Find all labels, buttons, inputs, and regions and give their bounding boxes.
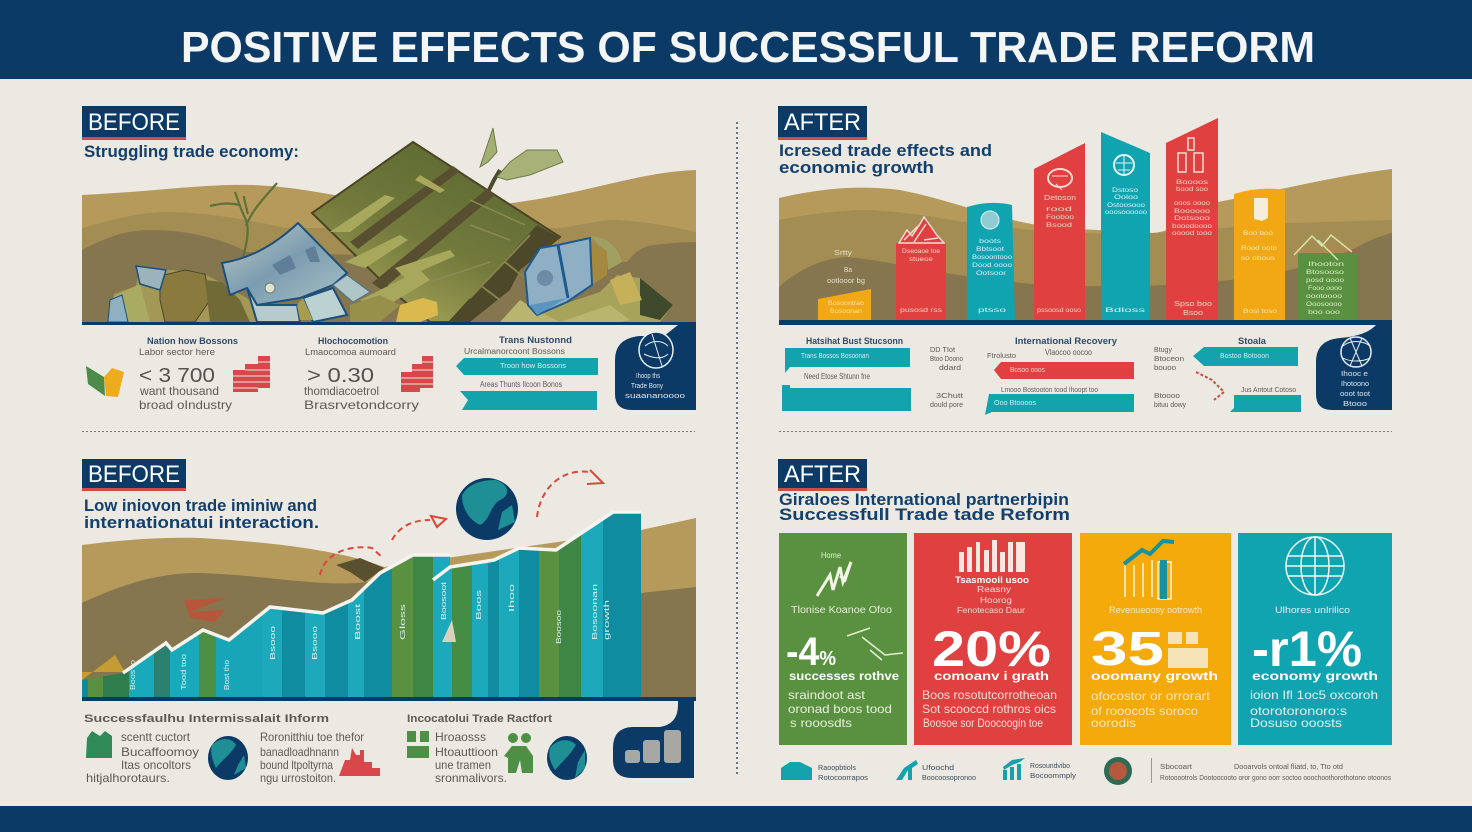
stat card: green: successes rothve — [789, 669, 899, 683]
illustration: collapsed crate and banknotes on hills — [82, 128, 696, 322]
before badge: BEFORE — [88, 461, 180, 488]
bar 8: Fooo oooo — [1308, 286, 1343, 292]
icon: red stacks — [233, 356, 270, 392]
column: national banners — [782, 336, 963, 411]
stat: less than 3700: Nation how Bossons — [147, 336, 238, 346]
after badge: AFTER — [784, 461, 861, 488]
navy callout with globe — [1316, 325, 1392, 410]
baseline — [82, 697, 696, 701]
hills — [779, 169, 1392, 320]
stat: more than 0.30: thomdiacoetrol — [304, 384, 379, 398]
rubble — [108, 268, 260, 322]
bar 2: stueoe — [909, 257, 934, 263]
stat card: teal: economy growth — [1252, 669, 1378, 683]
icon: seal — [1104, 757, 1132, 785]
column labels: Boosoot — [441, 582, 448, 620]
bar 6: Dotsooo — [1174, 216, 1211, 222]
bar 7 — [1234, 189, 1285, 320]
navy callout with globe: Ihooc e — [1341, 371, 1368, 378]
bar 5: Ostoosooo — [1107, 203, 1146, 209]
heading: Successfull Trade tade Reform — [779, 505, 1070, 524]
column: international economy — [985, 336, 1134, 415]
stat card: red: Boosoe sor Doocoogin toe — [923, 716, 1043, 730]
column: internal reform: Itas oncoltors — [121, 758, 191, 772]
crate — [312, 142, 560, 322]
bar 1: Bosoonan — [830, 309, 862, 315]
banknotes — [222, 223, 347, 305]
bar 8: Ooosoooo — [1306, 302, 1343, 308]
bar 3: Ootsoor — [976, 271, 1006, 277]
stat: more than 0.30: Hlochocomotion — [318, 336, 388, 346]
stat: less than 3700: want thousand — [139, 384, 219, 398]
column labels: Bsooo — [270, 626, 277, 660]
stat card: red: comoanv i grath — [934, 669, 1049, 683]
heading: Giraloes International partnerbipin — [779, 490, 1069, 509]
stat card: orange: ofocostor or orrorart — [1091, 689, 1211, 703]
icon: building — [781, 762, 812, 780]
column: trade reform — [407, 713, 587, 785]
stat: less than 3700: Labor sector here — [139, 347, 215, 357]
column: trade reform: une tramen — [435, 758, 491, 772]
column: stocks: Jus Antout Cotoso — [1241, 387, 1296, 394]
footer legend: Rotooootrols Dootoocooto oror gono oorr soctoo ooochoothorothotono otoonos — [1160, 775, 1391, 782]
stat card: orange — [1080, 533, 1231, 745]
bar 3: Bosoontooo — [972, 255, 1013, 261]
stat card: green — [779, 533, 907, 745]
column labels: Boosoo — [556, 610, 563, 644]
column: stocks: Btugy — [1154, 347, 1172, 354]
panel: before, struggling trade economy — [82, 106, 696, 412]
bar 3: boots — [979, 239, 1001, 245]
panel: after, international partnership — [778, 459, 1392, 785]
footer legend: Raoopbtiols — [818, 765, 857, 772]
area chart: rising teal and green columns — [82, 500, 641, 697]
column labels: growth — [604, 600, 611, 640]
panel: after, increased trade effects — [778, 106, 1392, 415]
stat card: green: Home — [821, 551, 842, 560]
column: international economy: Ftrolusto — [987, 353, 1016, 360]
column labels: Tood too — [181, 654, 188, 690]
footer legend: Ufoochd — [922, 765, 954, 772]
column: internal reform: Bucaffoomoy — [121, 745, 199, 759]
bar 8: posd oooo — [1306, 278, 1345, 284]
column: national banners: Btoo Doono — [930, 356, 963, 363]
heading — [779, 141, 992, 177]
column: national banners: ddard — [939, 365, 961, 372]
column: international economy: Ooo Btoooos — [994, 400, 1037, 407]
bar 6: Bsoo — [1183, 310, 1203, 317]
stat card: red: Tsasmooil usoo — [955, 575, 1030, 585]
bar 6: Boooooo — [1174, 209, 1211, 215]
heading: internationatui interaction. — [84, 513, 319, 532]
column labels: Bsooo — [312, 626, 319, 660]
heading — [84, 496, 319, 532]
column: internal reform: ngu urrostoiton. — [260, 771, 336, 785]
column: trade reform: sronmalivors. — [435, 771, 507, 785]
stat card: red: Fenotecaso Daur — [957, 606, 1025, 615]
bar 3: Bbtsoot — [976, 247, 1004, 253]
bar 8 — [1294, 235, 1357, 320]
stat card: green: Tlonise Koanoe Ofoo — [791, 605, 892, 616]
bar 8: Ihooton — [1308, 262, 1344, 268]
column: national banners: Trans Bossos Bosoonan — [801, 353, 869, 360]
stat card: red: Boos rosotutcorrotheoan — [922, 688, 1057, 702]
bar 2: Dseoaoe toe — [902, 249, 941, 255]
bar 8: boo ooo — [1308, 310, 1341, 316]
stat card: orange: ooomany growth — [1091, 669, 1218, 683]
column: stocks: bituu dowy — [1154, 402, 1186, 409]
globe — [456, 478, 518, 540]
bar 1 — [818, 250, 871, 320]
baseline — [779, 320, 1392, 325]
column: internal reform: banadloadhnann — [260, 745, 339, 759]
bar 1: Srtty — [834, 250, 853, 257]
title banner: POSITIVE EFFECTS OF SUCCESSFUL TRADE REFORM — [181, 23, 1315, 72]
footer legend: Dooarvols ontoal fliatd, to, Tto otd — [1234, 764, 1343, 771]
bar 4: Bsood — [1046, 223, 1072, 229]
title banner — [0, 0, 1472, 79]
stat: less than 3700: broad oIndustry — [139, 398, 232, 412]
dashed arrows — [320, 470, 603, 575]
footer legend: Rosoundvibo — [1030, 763, 1070, 770]
footer legend: Sbocoart — [1160, 764, 1192, 771]
column: internal reform — [84, 713, 380, 785]
bar 1: Ba — [844, 267, 852, 274]
bar 6: ooood tooo — [1172, 231, 1213, 237]
bar chart: rising trade columns — [818, 118, 1357, 320]
heading — [779, 490, 1070, 524]
bar 3: Dood oooo — [972, 263, 1013, 269]
navy callout with globe: Ihoop ths — [636, 373, 660, 380]
column: international economy: Bosoo ooos — [1010, 367, 1045, 374]
bar 6: Boooos — [1176, 180, 1208, 186]
column labels: Boost — [355, 604, 362, 640]
column: stocks: Btoooo — [1154, 393, 1180, 400]
bar 2: pusosd rss — [900, 308, 942, 314]
stat card: teal: ioion Ifl 1oc5 oxcoroh — [1250, 688, 1378, 702]
bar 7: Rood ooto — [1241, 246, 1278, 252]
bar 6: Spso boo — [1174, 301, 1212, 308]
column labels: Boos to — [130, 660, 137, 690]
navy callout with globe — [615, 325, 696, 410]
navy callout with globe: ooot toot — [1340, 391, 1370, 398]
column: national banners: DD TIot — [930, 347, 955, 354]
trade banners: Trans Nustonnd — [499, 335, 572, 345]
stat card: red: 20% — [932, 621, 1051, 677]
navy callout with globe: suaananoooo — [625, 393, 685, 400]
bar 6: ooos oooo — [1174, 201, 1211, 207]
bar 8: oootoooo — [1306, 294, 1343, 300]
column: stocks — [1154, 336, 1301, 412]
trade banners — [456, 335, 598, 410]
plants — [210, 183, 277, 262]
footer bar — [0, 806, 1472, 832]
footer legend — [781, 757, 1391, 785]
footer legend: Boocoosopronoo — [922, 775, 976, 782]
footer legend: Bocoommply — [1030, 773, 1077, 780]
after badge: AFTER — [784, 109, 861, 136]
column labels — [130, 582, 611, 690]
bar 4 — [1034, 143, 1085, 320]
trade banners: Troon how Bossons — [500, 363, 567, 370]
stat: less than 3700: < 3 700 — [139, 365, 215, 387]
stat card: teal: Dosuso ooosts — [1250, 716, 1342, 730]
column: internal reform: Roronitthiu toe thefor — [260, 730, 364, 744]
column: national banners: dould pore — [930, 402, 963, 409]
bar 5 — [1101, 132, 1150, 320]
column labels: Gloss — [400, 603, 407, 640]
bar 5: Bdloss — [1105, 308, 1145, 314]
bar 6: booodoooo — [1172, 224, 1213, 230]
column: national banners: 3Chutt — [936, 393, 963, 400]
column: trade reform: Hroaosss — [435, 730, 486, 744]
heading: Icresed trade effects and — [779, 141, 992, 160]
column: trade reform: Incocatolui Trade Ractfort — [407, 713, 552, 725]
stat card: green: oronad boos tood — [788, 702, 892, 716]
icon: rising bars — [896, 760, 918, 780]
stat card: red: Hoorog — [980, 596, 1012, 605]
column: stocks: bouoo — [1154, 365, 1176, 372]
heading: Struggling trade economy: — [84, 142, 299, 161]
column: internal reform: Successfaulhu Intermissalait Ihform — [84, 713, 329, 725]
bar 3 — [967, 203, 1015, 320]
column: national banners: Need Etose Shtunn fne — [804, 372, 870, 381]
stat: more than 0.30: Lmaocomoa aumoard — [305, 347, 396, 357]
bar 2 — [896, 217, 946, 320]
bar 3: ptsso — [978, 308, 1007, 314]
column: international economy: Vlaocoo oocoo — [1045, 348, 1092, 357]
bar 4: pssoosd ooso — [1037, 308, 1082, 314]
column: stocks: Btoceon — [1154, 356, 1184, 363]
bar 4: rood — [1046, 207, 1072, 213]
stat card: teal: -r1% — [1252, 621, 1362, 677]
heading: Low iniovon trade iminiw and — [84, 496, 317, 515]
icon: bar chart with arrow — [1003, 758, 1025, 780]
column: trade reform: Htoauttioon — [435, 745, 498, 759]
column labels: Boos — [476, 589, 483, 620]
stat card: orange: 35 — [1091, 623, 1164, 676]
stat card: teal — [1238, 533, 1392, 745]
column: stocks: Stoala — [1238, 336, 1267, 346]
bar 7: Bosl toso — [1243, 309, 1278, 315]
stat card: orange: oorodis — [1091, 716, 1136, 730]
column labels: Bosoonan — [592, 584, 599, 640]
stat card: orange: of rooocots soroco — [1091, 704, 1198, 718]
column labels: Bost tho — [224, 660, 231, 690]
column: international economy: International Recovery — [1015, 336, 1117, 346]
bar 5: ooosoooooo — [1105, 210, 1148, 216]
icon: red stacks — [401, 356, 433, 392]
column labels: Ihoo — [509, 584, 516, 612]
bar 4: Fooboo — [1046, 215, 1075, 221]
column: international economy: Lmooo Bostooton tood Ihoopt too — [1001, 387, 1098, 394]
navy callout with globe: Btooo — [1343, 401, 1367, 408]
stat card: red — [914, 533, 1072, 745]
trade banners: Urcalmanorcoont Bossons — [464, 347, 565, 356]
column: national banners: Hatsihat Bust Stucsonn — [806, 336, 903, 346]
bar 6: bood soo — [1176, 187, 1209, 193]
stat card: teal: Ulhores unlrilico — [1275, 605, 1350, 615]
stat: more than 0.30: > 0.30 — [307, 365, 374, 387]
heading: economic growth — [779, 158, 934, 177]
bar 7: so obous — [1241, 256, 1275, 262]
stat card: red: Sot scooccd rothros oics — [922, 702, 1056, 716]
stat card: red: Reasny — [977, 585, 1011, 594]
stat: more than 0.30 — [304, 336, 433, 412]
bar 5: Ooloo — [1114, 195, 1139, 201]
navy callout with globe: Trade Bony — [631, 383, 663, 390]
navy callout with cylinders — [613, 701, 694, 778]
bar 1: Bosoontrao — [828, 301, 865, 307]
hills — [82, 518, 696, 697]
before badge: BEFORE — [88, 109, 180, 136]
stat card: green: -4% — [786, 630, 836, 674]
bar 5: Dstoso — [1112, 188, 1139, 194]
bar 7: Boo boo — [1243, 231, 1274, 237]
icon: red bars — [339, 748, 380, 776]
column: internal reform: hitjalhorotaurs. — [86, 771, 170, 785]
column: internal reform: scentt cuctort — [121, 730, 191, 744]
stat: less than 3700 — [86, 336, 270, 412]
bar 8: Btosooso — [1306, 270, 1345, 276]
stat: more than 0.30: Brasrvetondcorry — [304, 398, 419, 412]
stat card: orange: Revenueoosy ootrowth — [1109, 605, 1202, 615]
column: stocks: Bostoo Botooon — [1220, 353, 1269, 360]
bar 1: ootlooor bg — [827, 278, 865, 285]
stat card: teal: otorotoronoro:s — [1250, 704, 1347, 718]
column: internal reform: bound ltpoltyrna — [260, 758, 333, 772]
baseline — [82, 322, 696, 325]
panel: before, low turnover — [82, 459, 696, 785]
bar 6 — [1166, 118, 1218, 320]
stat card: green: sraindoot ast — [788, 688, 866, 702]
bar 4: Detoson — [1044, 195, 1076, 202]
footer legend: Rotocoorrapos — [818, 775, 869, 782]
stat card: green: s rooosdts — [790, 716, 852, 730]
navy callout with globe: Ihotoono — [1341, 381, 1369, 388]
trade banners: Areas Thunts Ilcoon Bonos — [480, 380, 562, 389]
